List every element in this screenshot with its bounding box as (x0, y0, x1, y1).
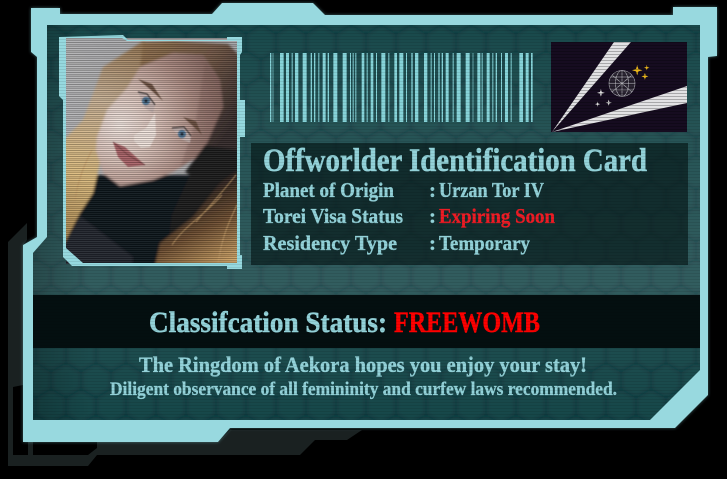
barcode (270, 53, 533, 122)
row: residency type: : (429, 231, 436, 255)
hair strands (75, 150, 237, 264)
shadow side of face (182, 79, 216, 166)
portrait frame (59, 35, 245, 269)
row: planet of origin: Planet of Origin (263, 178, 394, 202)
lips (113, 142, 145, 167)
golden lower hair (154, 171, 237, 263)
face (96, 53, 223, 186)
row: residency type: Temporary (439, 231, 530, 255)
row: planet of origin: : (429, 178, 436, 202)
info panel (251, 143, 688, 265)
row: residency type: Residency Type (263, 231, 397, 255)
flag (551, 42, 687, 132)
dark clothing base (66, 173, 192, 263)
row: residency type (263, 231, 530, 255)
eyebrows (138, 79, 163, 101)
classification label: Classifcation Status: (149, 306, 387, 339)
portrait photo (60, 38, 245, 270)
left hair (66, 41, 145, 245)
nose (134, 113, 156, 148)
dark right hair (170, 144, 237, 232)
flag white rays (552, 42, 687, 132)
flag globe (609, 70, 635, 96)
eye right (172, 127, 191, 143)
row: torei visa status (263, 204, 555, 228)
card background (33, 25, 700, 420)
classification value: FREEWOMB (394, 306, 540, 339)
row: planet of origin (263, 178, 544, 202)
classification band (33, 295, 700, 348)
advisory message: Diligent observance of all femininity and curfew laws recommended. (110, 380, 617, 400)
decorative back frame (8, 223, 362, 466)
row: torei visa status: Expiring Soon (439, 204, 555, 228)
eye left (138, 92, 155, 113)
neck shadow (184, 146, 206, 176)
title: Offworlder Identification Card (263, 143, 647, 179)
row: torei visa status: : (429, 204, 436, 228)
photo backdrop (66, 38, 237, 177)
row: planet of origin: Urzan Tor IV (439, 178, 544, 202)
top hair (140, 41, 240, 150)
jacket (66, 216, 134, 264)
welcome message: The Ringdom of Aekora hopes you enjoy your stay! (139, 352, 587, 377)
flag stars (595, 65, 649, 107)
row: torei visa status: Torei Visa Status (263, 204, 403, 228)
